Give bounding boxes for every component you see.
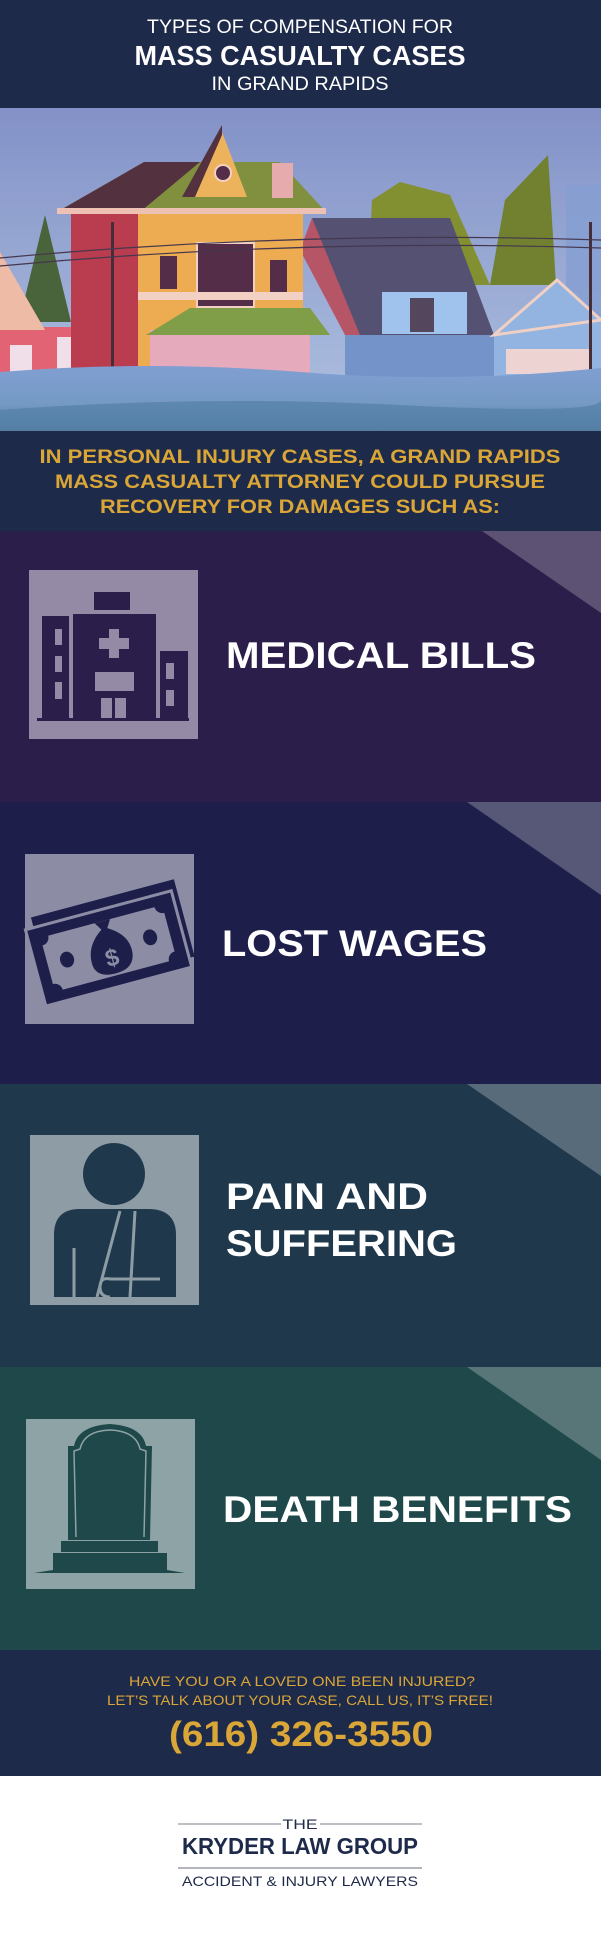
- illustration: flooded houses: [0, 108, 601, 431]
- banner intro text: IN PERSONAL INJURY CASES, A GRAND RAPIDS: [40, 447, 560, 468]
- title line 1: TYPES OF COMPENSATION FOR: [147, 17, 453, 38]
- header: [0, 0, 601, 108]
- logo: kryder law group: THE: [282, 1816, 318, 1832]
- title main: MASS CASUALTY CASES: [134, 40, 466, 71]
- logo: kryder law group: [178, 1816, 422, 1889]
- heading: lost wages: LOST WAGES: [222, 923, 487, 964]
- panel: lost wages: [0, 802, 601, 1084]
- heading: pain and suffering: PAIN AND: [226, 1176, 428, 1217]
- panel: pain and suffering: SUFFERING: [226, 1223, 457, 1264]
- icon: money: $: [102, 943, 123, 973]
- call to action: LET’S TALK ABOUT YOUR CASE, CALL US, IT’S FREE!: [107, 1692, 493, 1708]
- banner intro text: MASS CASUALTY ATTORNEY COULD PURSUE: [55, 472, 545, 493]
- call to action: HAVE YOU OR A LOVED ONE BEEN INJURED?: [129, 1673, 475, 1689]
- icon: tombstone: [26, 1419, 195, 1589]
- call to action: [0, 1650, 601, 1776]
- panel: pain and suffering: [0, 1084, 601, 1367]
- banner intro text: RECOVERY FOR DAMAGES SUCH AS:: [100, 497, 500, 518]
- panel: death benefits: [0, 1367, 601, 1650]
- logo: kryder law group: ACCIDENT & INJURY LAWYERS: [182, 1873, 418, 1889]
- title line 3: IN GRAND RAPIDS: [212, 74, 388, 95]
- heading: death benefits: DEATH BENEFITS: [223, 1489, 572, 1530]
- icon: hospital: [29, 570, 198, 739]
- phone number: (616) 326-3550: [169, 1715, 433, 1754]
- icon: injured person: [30, 1135, 199, 1305]
- banner intro text: [0, 431, 601, 531]
- logo: kryder law group: KRYDER LAW GROUP: [182, 1833, 418, 1859]
- icon: money: [21, 854, 197, 1024]
- panel: medical bills: [0, 531, 601, 802]
- heading: medical bills: MEDICAL BILLS: [226, 635, 536, 676]
